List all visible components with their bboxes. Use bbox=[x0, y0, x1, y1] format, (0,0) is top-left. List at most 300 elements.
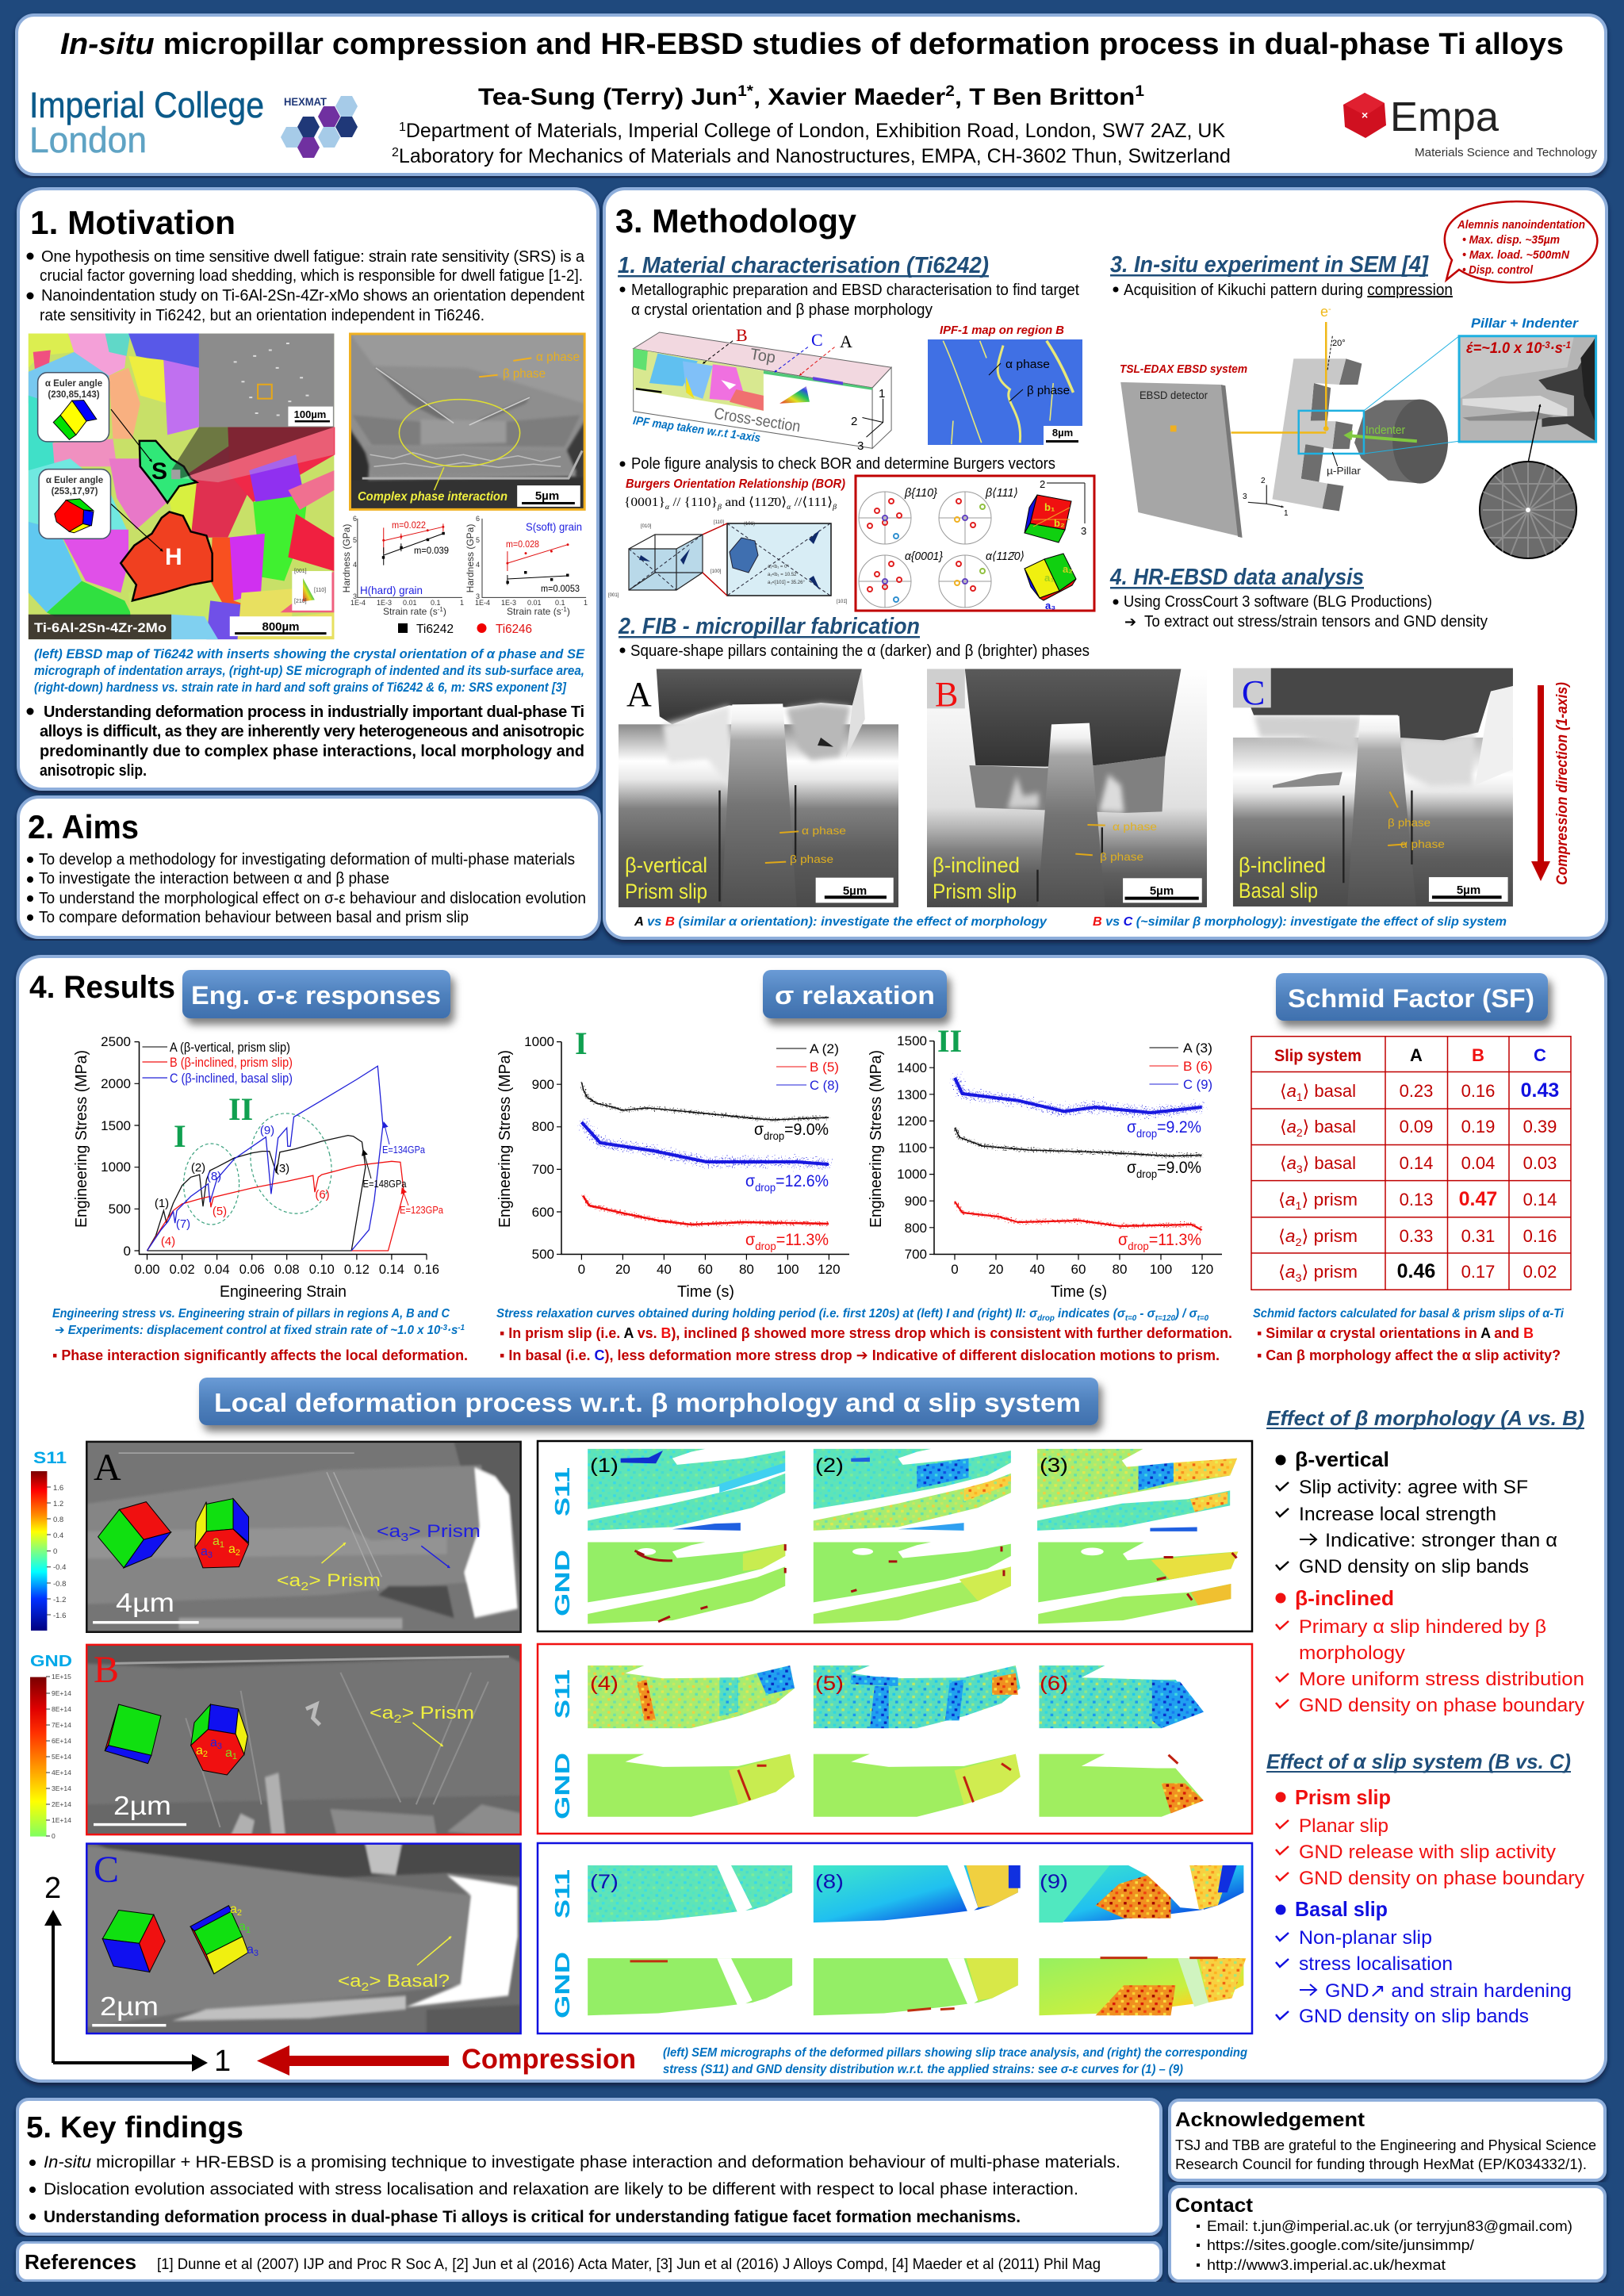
axes arrows 1-2 bbox=[44, 1872, 231, 2078]
caption: EBSD map and hardness: (right-down) hardness vs. strain rate in hard and soft grains of Ti6242 & 6, m: SRS exponent [3] bbox=[34, 680, 566, 695]
chart: engineering stress-strain: 0.16 bbox=[414, 1262, 439, 1277]
table: Schmid factors: 0.16 bbox=[1523, 1226, 1557, 1246]
table: Schmid factors: 2 bbox=[1297, 1126, 1303, 1139]
button heading: stress relaxation bbox=[763, 970, 947, 1018]
chart: stress relaxation I: =11.3% bbox=[776, 1231, 829, 1249]
callout: Alemnis nanoindentation bbox=[1445, 201, 1597, 282]
SEM pillar A: A bbox=[626, 675, 652, 714]
chart: stress relaxation I: σ bbox=[754, 1121, 764, 1139]
hardness vs strain rate charts: 0.1 bbox=[555, 599, 565, 607]
chart: stress relaxation II: A (3) bbox=[1183, 1041, 1212, 1056]
IPF map block diagram: IPF map taken w.r.t 1-axis bbox=[632, 414, 761, 445]
IPF map block diagram: Top bbox=[749, 346, 777, 366]
hardness vs strain rate charts: 6 bbox=[353, 515, 357, 523]
Burgers Orientation Relationship: and ⟨112̄0⟩ bbox=[722, 496, 787, 509]
table: Schmid factors: 1 bbox=[1297, 1091, 1303, 1103]
chart: engineering stress-strain: 500 bbox=[109, 1202, 131, 1217]
caption: relaxation: - σ bbox=[1136, 1307, 1155, 1320]
heading: 4. Results: 4. Results bbox=[29, 970, 175, 1005]
affiliation 1: Department of Materials, Imperial College of London, Exhibition Road, London, SW7 2AZ, UK bbox=[406, 120, 1225, 142]
button heading: Local deformation process: Local deformation process w.r.t. β morphology and α slip system bbox=[214, 1388, 1081, 1417]
heat maps: pillar A: (1) bbox=[590, 1455, 619, 1477]
text: CrossCourt: To extract out stress/strain tensors and GND density bbox=[1144, 613, 1488, 631]
chart: stress relaxation I: I bbox=[575, 1025, 588, 1061]
Burgers Orientation Relationship: a₃<[101̄] = 35.26° bbox=[768, 581, 805, 585]
chart: stress relaxation I: A (2) bbox=[810, 1041, 839, 1056]
SEM micrograph B: > Prism bbox=[402, 1703, 474, 1723]
chart: engineering stress-strain: (5) bbox=[213, 1205, 227, 1218]
inset: pillar + indenter bbox=[1459, 316, 1596, 462]
SEM pillar C: C bbox=[1242, 673, 1265, 712]
table: Schmid factors: ⟨a bbox=[1280, 1153, 1297, 1173]
SEM micrograph B: a bbox=[225, 1746, 232, 1760]
chart: stress relaxation I: 120 bbox=[818, 1262, 841, 1277]
hardness vs strain rate charts: ) bbox=[443, 606, 446, 617]
hardness vs strain rate charts: 1E-4 bbox=[350, 599, 366, 607]
EBSD map with inserts bbox=[29, 334, 335, 639]
diagram: in-situ SEM setup: e bbox=[1320, 304, 1328, 320]
caption: relaxation: t=120 bbox=[1155, 1314, 1175, 1323]
SEM micrograph A: a bbox=[201, 1545, 208, 1558]
caption: SEM and heat maps: (left) SEM micrographs of the deformed pillars showing slip trace analysis, and (right) the corresponding bbox=[663, 2046, 1248, 2060]
caption: stress-strain: ➔ Experiments: displacement control at fixed strain rate of ~1.0 x 10 bbox=[55, 1324, 453, 1337]
hardness vs strain rate charts: 3 bbox=[353, 592, 357, 600]
chart: stress relaxation I bbox=[496, 1025, 849, 1301]
SEM pillar B: β-inclined bbox=[933, 853, 1020, 877]
colour bar: S11: -1.6 bbox=[53, 1612, 66, 1620]
text block: motivation bullets: crucial factor governing load shedding, which is responsible for dwell fatigue [1-2]. bbox=[40, 267, 583, 285]
table: Schmid factors: 0.04 bbox=[1461, 1153, 1495, 1173]
hardness vs strain rate charts: m=0.039 bbox=[414, 545, 449, 556]
chart: stress relaxation I: 20 bbox=[615, 1262, 630, 1277]
table: Schmid factors: 0.03 bbox=[1523, 1153, 1557, 1173]
SEM pillar A bbox=[619, 669, 898, 907]
authors: 1 bbox=[1135, 83, 1144, 100]
chart: engineering stress-strain: E=134GPa bbox=[382, 1144, 426, 1156]
colour bar: S11: -1.2 bbox=[53, 1596, 66, 1604]
diagram: in-situ SEM setup: EBSD detector bbox=[1139, 389, 1208, 401]
logo: Imperial College London bbox=[29, 85, 264, 160]
inset: pillar + indenter: ·s bbox=[1550, 340, 1563, 357]
heat maps: pillar C: (8) bbox=[815, 1871, 844, 1893]
panel: References: References bbox=[25, 2250, 136, 2274]
chart: stress relaxation II: Time (s) bbox=[1051, 1283, 1107, 1301]
EBSD map with inserts: [001] bbox=[294, 569, 307, 574]
hardness vs strain rate charts: 3 bbox=[476, 592, 480, 600]
chart: engineering stress-strain: (2) bbox=[191, 1161, 205, 1175]
Burgers Orientation Relationship bbox=[608, 477, 848, 604]
chart: stress relaxation I: 40 bbox=[657, 1262, 672, 1277]
Burgers Orientation Relationship: //⟨111⟩ bbox=[791, 496, 833, 509]
chart: stress relaxation I: C (8) bbox=[810, 1078, 839, 1093]
SEM micrograph A: 4µm bbox=[116, 1588, 174, 1617]
text: CrossCourt bbox=[1113, 593, 1488, 631]
chart: stress relaxation I: 60 bbox=[698, 1262, 713, 1277]
caption: relaxation bbox=[496, 1307, 1232, 1363]
colour bar: GND: 6E+14 bbox=[52, 1737, 71, 1745]
text block: metallographic preparation: Metallographic preparation and EBSD characterisation to find target bbox=[631, 282, 1079, 299]
SEM micrograph B: a bbox=[196, 1744, 203, 1757]
chart: stress relaxation II: σ bbox=[1127, 1159, 1137, 1177]
EBSD map with inserts: [110] bbox=[314, 588, 326, 593]
EBSD map with inserts: 100µm bbox=[294, 408, 326, 420]
text block: understanding deformation: Understanding deformation process in industrially important dual-phase Ti bbox=[44, 703, 584, 721]
chart: engineering stress-strain: II bbox=[228, 1091, 253, 1127]
chart: stress relaxation I: =12.6% bbox=[776, 1172, 829, 1190]
SEM micrograph A: a bbox=[213, 1535, 220, 1548]
text column: effect of alpha slip system: GND release with slip activity bbox=[1299, 1842, 1556, 1863]
colour bar: GND: 5E+14 bbox=[52, 1753, 71, 1761]
text block: key findings: In-situ micropillar + HR-EBSD is a promising technique to investigate phase interaction and deformation behaviour of multi-phase materials. bbox=[44, 2153, 1120, 2171]
axes arrows 1-2: 2 bbox=[44, 1872, 61, 1905]
heat maps: pillar B: (4) bbox=[590, 1673, 619, 1695]
arrow and label: compression: Compression bbox=[462, 2044, 636, 2075]
button heading: Eng. stress-strain responses: Eng. σ-ε responses bbox=[191, 981, 441, 1010]
diagram: in-situ SEM setup: - bbox=[1328, 305, 1331, 314]
SEM micrograph B bbox=[84, 1641, 523, 1838]
SEM micrograph B: a bbox=[210, 1736, 217, 1750]
text block: key findings: Understanding deformation process in dual-phase Ti alloys is critical for understanding fatigue facet formation mechanisms. bbox=[44, 2208, 1021, 2226]
chart: stress relaxation II: II bbox=[937, 1023, 962, 1059]
chart: stress relaxation II: 1400 bbox=[897, 1060, 927, 1075]
chart: engineering stress-strain: 0.10 bbox=[309, 1262, 335, 1277]
heading: 2. Aims: 2. Aims bbox=[28, 808, 139, 845]
chart: stress relaxation II: 1100 bbox=[898, 1140, 927, 1156]
chart: engineering stress-strain: (6) bbox=[315, 1188, 330, 1202]
colour bar: S11 bbox=[31, 1449, 67, 1631]
hardness vs strain rate charts: Hardness (GPa) bbox=[465, 524, 476, 592]
text block: aims bbox=[27, 851, 586, 926]
caption: EBSD map and hardness bbox=[34, 647, 585, 695]
caption: relaxation: Stress relaxation curves obtained during holding period (i.e. first 120s) at (left) I and (right) II: σ bbox=[496, 1307, 1051, 1320]
chart: stress relaxation I: 900 bbox=[532, 1077, 554, 1092]
heat maps: pillar C: (9) bbox=[1040, 1871, 1068, 1893]
chart: engineering stress-strain: E=123GPa bbox=[400, 1204, 444, 1216]
chart: stress relaxation I: drop bbox=[755, 1240, 776, 1252]
table: Schmid factors: ⟨a bbox=[1278, 1226, 1295, 1246]
panel: References bbox=[17, 2242, 1161, 2281]
chart: engineering stress-strain: 0.02 bbox=[170, 1262, 195, 1277]
hardness vs strain rate charts: ) bbox=[567, 606, 570, 617]
caption: EBSD map and hardness: (left) EBSD map of Ti6242 with inserts showing the crystal orientation of α phase and SE bbox=[34, 647, 585, 661]
sub-heading: material characterisation: 1. Material characterisation (Ti6242) bbox=[618, 253, 989, 278]
logo: HEXMAT bbox=[281, 95, 358, 158]
pole figures box: β{110} bbox=[904, 486, 937, 500]
IPF map block diagram: Cross-section bbox=[713, 405, 802, 436]
text column: effect of alpha slip system: Effect of α slip system (B vs. C) bbox=[1266, 1750, 1571, 1773]
text column: effect of alpha slip system: stress localisation bbox=[1299, 1953, 1453, 1975]
hardness vs strain rate charts: m=0.028 bbox=[506, 539, 539, 550]
chart: stress relaxation II: =9.2% bbox=[1157, 1118, 1201, 1137]
table: Schmid factors: ⟨a bbox=[1278, 1262, 1295, 1282]
pole figures box: β⟨111⟩ bbox=[985, 486, 1018, 500]
colour bar: GND bbox=[30, 1653, 72, 1840]
heat maps: pillar C: GND bbox=[550, 1952, 574, 2018]
authors: 2 bbox=[945, 83, 955, 100]
Kikuchi pattern bbox=[1480, 462, 1576, 558]
SEM micrograph A: <a bbox=[377, 1521, 396, 1541]
table: Schmid factors: 0.47 bbox=[1459, 1188, 1497, 1210]
pole figures box: α{0001} bbox=[905, 550, 943, 563]
SEM micrograph B: 2 bbox=[203, 1750, 208, 1759]
text block: aims: To develop a methodology for investigating deformation of multi-phase materials bbox=[39, 851, 575, 868]
panel: 5. Key findings bbox=[17, 2099, 1161, 2234]
caption: stress-strain bbox=[52, 1307, 468, 1363]
Burgers Orientation Relationship: Burgers Orientation Relationship (BOR) bbox=[626, 477, 845, 491]
table: Schmid factors: 3 bbox=[1297, 1163, 1303, 1175]
SEM micrograph of indent: β phase bbox=[503, 367, 546, 381]
SEM micrograph B: <a bbox=[370, 1703, 389, 1723]
text column: effect of alpha slip system: Prism slip bbox=[1295, 1785, 1391, 1809]
panel: 2. Aims bbox=[18, 797, 599, 937]
heading: 5. Key findings: 5. Key findings bbox=[26, 2111, 243, 2145]
SEM micrograph A: > Prism bbox=[408, 1521, 481, 1541]
panel: header bbox=[17, 15, 1606, 174]
text column: effect of beta morphology: Primary α slip hindered by β bbox=[1299, 1616, 1546, 1638]
SEM micrograph of indent: 5µm bbox=[535, 489, 559, 503]
table: Schmid factors: 3 bbox=[1295, 1271, 1302, 1284]
colour bar: GND: 0 bbox=[52, 1832, 56, 1840]
diagram: in-situ SEM setup: 2 bbox=[1261, 477, 1266, 485]
inset: pillar + indenter: -1 bbox=[1563, 339, 1571, 351]
caption: SEM and heat maps: stress (S11) and GND density distribution w.r.t. the applied strains: see σ-ε curves for (1) – (9) bbox=[663, 2063, 1183, 2076]
hardness vs strain rate charts: -1 bbox=[438, 606, 443, 613]
hardness vs strain rate charts bbox=[341, 515, 588, 636]
SEM micrograph A: 3 bbox=[208, 1550, 213, 1560]
diagram: in-situ SEM setup: 20° bbox=[1332, 339, 1346, 348]
chart: stress relaxation I: 0 bbox=[578, 1262, 585, 1277]
table: Schmid factors: 0.13 bbox=[1400, 1190, 1433, 1209]
chart: stress relaxation II: σ bbox=[1118, 1231, 1128, 1249]
heat maps: pillar B: (6) bbox=[1040, 1673, 1068, 1695]
text column: effect of beta morphology: morphology bbox=[1299, 1642, 1405, 1664]
chart: engineering stress-strain bbox=[73, 1034, 444, 1301]
IPF map block diagram: C bbox=[811, 330, 823, 350]
Burgers Orientation Relationship: [001] bbox=[608, 593, 619, 598]
callout: Alemnis nanoindentation: Alemnis nanoindentation bbox=[1457, 219, 1585, 232]
text block: motivation bullets: Nanoindentation study on Ti-6Al-2Sn-4Zr-xMo shows an orientation dependent bbox=[41, 287, 584, 305]
text block: aims: To compare deformation behaviour between basal and prism slip bbox=[39, 909, 469, 926]
chart: stress relaxation I: drop bbox=[755, 1181, 776, 1194]
title: In-situ micropillar compression and HR-EBSD studies of deformation process in dual-phase Ti alloys bbox=[60, 28, 1564, 61]
chart: stress relaxation I: 800 bbox=[532, 1119, 554, 1134]
Burgers Orientation Relationship: α bbox=[787, 503, 791, 511]
heading: 1. Motivation: 1. Motivation bbox=[30, 204, 236, 241]
chart: stress relaxation II: 900 bbox=[905, 1194, 927, 1209]
table: Schmid factors: ⟨a bbox=[1280, 1117, 1297, 1137]
table: Schmid factors: B bbox=[1472, 1045, 1484, 1065]
SEM micrograph A: <a bbox=[277, 1570, 297, 1590]
panel: Contact: Contact bbox=[1175, 2194, 1254, 2217]
inset: pillar + indenter: Pillar + Indenter bbox=[1471, 316, 1579, 331]
chart: stress relaxation II: 700 bbox=[905, 1247, 927, 1262]
heat maps: pillar A: GND bbox=[550, 1550, 574, 1616]
text block: understanding deformation: anisotropic slip. bbox=[40, 762, 147, 780]
text: pole figure analysis: Pole figure analysis to check BOR and determine Burgers vectors bbox=[631, 455, 1055, 473]
caption: Schmid factor: ▪ Similar α crystal orientations in A and B bbox=[1257, 1324, 1534, 1341]
hardness vs strain rate charts: H(hard) grain bbox=[360, 584, 423, 596]
diagram: in-situ SEM setup: 1 bbox=[1284, 509, 1289, 518]
chart: stress relaxation II: drop bbox=[1136, 1167, 1157, 1180]
text column: effect of alpha slip system: GND↗ and strain hardening bbox=[1325, 1980, 1572, 2002]
text column: effect of alpha slip system: GND density on slip bands bbox=[1299, 2006, 1529, 2027]
table: Schmid factors: 1 bbox=[1295, 1199, 1302, 1212]
chart: stress relaxation II: 20 bbox=[989, 1262, 1003, 1277]
IPF map block diagram: A bbox=[840, 332, 852, 351]
text block: motivation bullets: rate sensitivity in Ti6242, but an orientation independent in Ti6246. bbox=[40, 307, 485, 324]
EBSD map with inserts: (253,17,97) bbox=[52, 487, 98, 496]
inset: pillar + indenter: -3 bbox=[1542, 339, 1550, 351]
caption: relaxation: ▪ In prism slip (i.e. A vs. B), inclined β showed more stress drop which is consistent with further deformation. bbox=[500, 1324, 1232, 1341]
chart: stress relaxation II: B (6) bbox=[1183, 1059, 1212, 1074]
colour bar: S11: 1.2 bbox=[53, 1500, 63, 1508]
SEM pillar B: β phase bbox=[1100, 850, 1143, 863]
chart: stress relaxation II: 1500 bbox=[897, 1033, 927, 1048]
colour bar: S11: -0.4 bbox=[53, 1563, 66, 1572]
SEM micrograph C: 1 bbox=[246, 1926, 251, 1935]
sub-heading: HR-EBSD data analysis: 4. HR-EBSD data analysis bbox=[1109, 565, 1364, 590]
EBSD map with inserts: α Euler angle bbox=[46, 476, 103, 485]
SEM pillar B bbox=[927, 669, 1207, 907]
Burgers Orientation Relationship: a₂<b₁ = 10.52° bbox=[768, 573, 799, 577]
table: Schmid factors: A bbox=[1410, 1045, 1423, 1065]
panel: Acknowledgement bbox=[1170, 2100, 1605, 2180]
heat maps: pillar B bbox=[538, 1644, 1252, 1834]
heat maps: pillar B: GND bbox=[550, 1753, 574, 1819]
SEM micrograph C: a bbox=[230, 1903, 237, 1916]
chart: stress relaxation II: 60 bbox=[1071, 1262, 1086, 1277]
chart: stress relaxation II: drop bbox=[1128, 1240, 1149, 1252]
text block: aims: To understand the morphological effect on σ-ε behaviour and dislocation evolution bbox=[39, 890, 586, 907]
SEM micrograph B: 1 bbox=[232, 1752, 237, 1761]
chart: stress relaxation I: 600 bbox=[532, 1205, 554, 1220]
arrow and label: compression bbox=[257, 2044, 636, 2076]
chart: stress relaxation II: =9.0% bbox=[1157, 1159, 1201, 1177]
callout: Alemnis nanoindentation: • Disp. control bbox=[1462, 264, 1534, 277]
colour bar: S11: -0.8 bbox=[53, 1580, 66, 1589]
colour bar: GND: 4E+14 bbox=[52, 1769, 71, 1777]
SEM micrograph of indent bbox=[349, 334, 586, 512]
heat maps: pillar B: (5) bbox=[815, 1673, 844, 1695]
colour bar: GND: GND bbox=[30, 1653, 72, 1670]
EBSD map with inserts: 800µm bbox=[262, 620, 300, 634]
heat maps: pillar C: S11 bbox=[550, 1869, 574, 1918]
chart: engineering stress-strain: 2500 bbox=[101, 1034, 131, 1049]
table: Schmid factors: 0.23 bbox=[1400, 1081, 1433, 1101]
table: Schmid factors: 0.33 bbox=[1400, 1226, 1433, 1246]
table: Schmid factors: ⟩ basal bbox=[1303, 1081, 1356, 1101]
hardness vs strain rate charts: Ti6246 bbox=[496, 623, 532, 636]
text: CrossCourt: ➔ bbox=[1124, 614, 1136, 630]
hardness vs strain rate charts: m=0.0053 bbox=[541, 583, 580, 594]
Burgers Orientation Relationship: β bbox=[717, 503, 722, 511]
chart: stress relaxation I: 80 bbox=[739, 1262, 754, 1277]
text column: effect of beta morphology: Indicative: stronger than α bbox=[1325, 1530, 1557, 1551]
table: Schmid factors: ⟩ prism bbox=[1301, 1226, 1358, 1246]
text block: understanding deformation: predominantly due to complex phase interactions, local morphology and bbox=[40, 742, 584, 760]
chart: engineering stress-strain: C (β-inclined, basal slip) bbox=[170, 1071, 293, 1086]
panel: 1. Motivation bbox=[18, 189, 598, 789]
arrow: compression direction: Compression direction (1-axis) bbox=[1554, 682, 1571, 885]
caption: relaxation: t=0 bbox=[1197, 1314, 1208, 1323]
chart: engineering stress-strain: 0.12 bbox=[344, 1262, 370, 1277]
panel: Acknowledgement: Acknowledgement bbox=[1175, 2109, 1365, 2131]
chart: engineering stress-strain: 0 bbox=[124, 1244, 131, 1259]
pole figures box: a₂ bbox=[1063, 563, 1073, 575]
chart: engineering stress-strain: 2000 bbox=[101, 1076, 131, 1091]
colour bar: S11: 1.6 bbox=[53, 1484, 63, 1493]
caption: EBSD map and hardness: micrograph of indentation arrays, (right-up) SE micrograph of indented and its sub-surface area, bbox=[34, 664, 584, 678]
table: Schmid factors: Slip system bbox=[1274, 1047, 1362, 1065]
chart: stress relaxation II: =11.3% bbox=[1149, 1231, 1201, 1249]
chart: stress relaxation I: σ bbox=[745, 1172, 756, 1190]
caption: relaxation: ) / σ bbox=[1174, 1307, 1197, 1320]
SEM micrograph B: B bbox=[94, 1649, 119, 1691]
panel: 4. Results bbox=[17, 956, 1606, 2081]
EBSD map with inserts: H bbox=[165, 544, 182, 570]
table: Schmid factors: ⟨a bbox=[1278, 1190, 1295, 1209]
SEM micrograph B: 3 bbox=[217, 1742, 222, 1751]
caption: relaxation: t=0 bbox=[1125, 1314, 1137, 1323]
text block: key findings: Dislocation evolution associated with stress localisation and relaxation are likely to be different with respect to local phase interaction. bbox=[44, 2180, 1078, 2198]
logo: Empa bbox=[1343, 93, 1598, 159]
IPF map block diagram bbox=[632, 325, 891, 453]
SEM pillar A: Prism slip bbox=[625, 880, 707, 903]
logo: Empa: Materials Science and Technology bbox=[1415, 146, 1598, 159]
table: Schmid factors: 0.46 bbox=[1397, 1260, 1435, 1282]
text block: motivation bullets bbox=[27, 248, 585, 324]
chart: stress relaxation I: drop bbox=[764, 1129, 784, 1142]
colour bar: S11: 0.8 bbox=[53, 1516, 63, 1524]
Burgers Orientation Relationship: // {110} bbox=[669, 496, 718, 509]
chart: stress relaxation I: =9.0% bbox=[784, 1121, 829, 1139]
panel: Acknowledgement: TSJ and TBB are grateful to the Engineering and Physical Science bbox=[1175, 2137, 1596, 2153]
chart: engineering stress-strain: Engineering Strain bbox=[220, 1283, 347, 1301]
colour bar: GND: 8E+14 bbox=[52, 1705, 71, 1713]
chart: engineering stress-strain: (4) bbox=[161, 1235, 175, 1248]
SEM micrograph A: a bbox=[228, 1543, 236, 1556]
text column: effect of beta morphology: β-vertical bbox=[1295, 1447, 1389, 1471]
SEM pillar C: β-inclined bbox=[1239, 853, 1326, 877]
chart: engineering stress-strain: A (β-vertical, prism slip) bbox=[170, 1040, 290, 1055]
chart: stress relaxation II: Engineering Stress (MPa) bbox=[868, 1050, 885, 1228]
SEM pillar C: Basal slip bbox=[1239, 879, 1318, 903]
IPF map block diagram: 2 bbox=[851, 415, 857, 428]
button heading: Eng. stress-strain responses bbox=[182, 970, 450, 1018]
chart: engineering stress-strain: (1) bbox=[155, 1197, 169, 1210]
caption: relaxation: indicates (σ bbox=[1055, 1307, 1126, 1320]
IPF map block diagram: B bbox=[736, 325, 748, 345]
hardness vs strain rate charts: S(soft) grain bbox=[526, 520, 582, 533]
chart: stress relaxation I: 1000 bbox=[524, 1034, 554, 1049]
affiliation 2: 2 bbox=[392, 146, 399, 159]
Burgers Orientation Relationship: β bbox=[832, 503, 837, 511]
IPF map block diagram: 1 bbox=[879, 387, 885, 401]
text column: effect of beta morphology: GND density on slip bands bbox=[1299, 1556, 1529, 1577]
chart: engineering stress-strain: 1000 bbox=[101, 1159, 131, 1175]
callout: Alemnis nanoindentation: • Max. disp. ~35µm bbox=[1462, 234, 1560, 247]
text column: effect of beta morphology: Effect of β morphology (A vs. B) bbox=[1266, 1406, 1584, 1430]
callout: Alemnis nanoindentation: • Max. load. ~500mN bbox=[1462, 249, 1570, 262]
SEM pillar B: Prism slip bbox=[933, 880, 1017, 903]
H grain bbox=[121, 512, 213, 600]
chart: engineering stress-strain: (3) bbox=[275, 1162, 289, 1175]
chart: stress relaxation II: σ bbox=[1127, 1118, 1137, 1137]
text: CrossCourt: Using CrossCourt 3 software (BLG Productions) bbox=[1124, 593, 1432, 611]
text column: effect of beta morphology: GND density on phase boundary bbox=[1299, 1695, 1584, 1716]
heat maps: pillar A bbox=[538, 1441, 1252, 1631]
chart: stress relaxation I: σ bbox=[745, 1231, 756, 1249]
